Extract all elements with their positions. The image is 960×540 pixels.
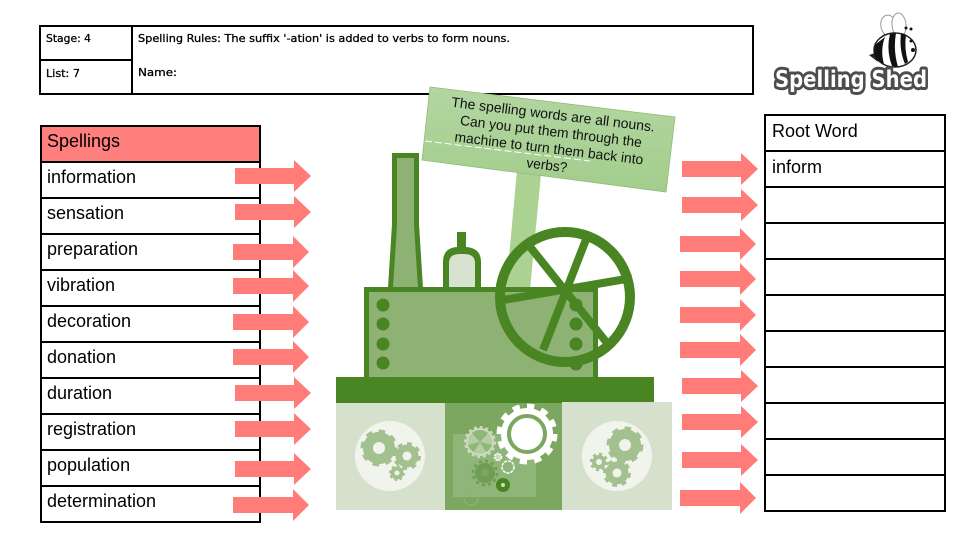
- centre inner panel: [453, 434, 536, 497]
- base platform: [336, 377, 654, 403]
- root word table: inform: [772, 157, 822, 177]
- sign board: verbs?: [526, 154, 568, 175]
- spellings table: Spellings: [47, 131, 120, 151]
- sign board: machine to turn them back into: [454, 128, 644, 167]
- boiler box: [366, 290, 596, 380]
- spellings table: sensation: [47, 203, 124, 223]
- right gear circle: [582, 421, 652, 491]
- arrows: machine to root words: [680, 153, 758, 514]
- bottle: [443, 232, 481, 288]
- flywheel: [500, 232, 632, 362]
- logo: Spelling Shed bee: [775, 12, 927, 93]
- large white gear: [499, 406, 555, 462]
- right panel: [562, 402, 672, 510]
- centre small gears: [464, 427, 514, 505]
- spellings table: vibration: [47, 275, 115, 295]
- spellings table: donation: [47, 347, 116, 367]
- chimney: [388, 153, 423, 288]
- spellings table: decoration: [47, 311, 131, 331]
- spellings table: registration: [47, 419, 136, 439]
- spellings table: population: [47, 455, 130, 475]
- spellings table: duration: [47, 383, 112, 403]
- machine illustration: [336, 153, 672, 510]
- centre panel: [445, 403, 562, 510]
- arrows: spellings to machine: [233, 160, 311, 521]
- header table: Spelling Rules: The suffix '-ation' is added to verbs to form nouns.: [138, 32, 510, 45]
- sign board: Can you put them through the: [459, 112, 643, 150]
- left panel: [336, 403, 445, 510]
- spellings table: information: [47, 167, 136, 187]
- left gear circle: [355, 421, 425, 491]
- spellings table: preparation: [47, 239, 138, 259]
- root word table: [765, 115, 945, 511]
- spellings table: determination: [47, 491, 156, 511]
- sign board: [422, 87, 675, 192]
- rivets: [376, 298, 582, 370]
- header table: Stage: 4: [46, 32, 91, 45]
- header table: [40, 26, 753, 94]
- sign post: [506, 170, 541, 290]
- header table: Name:: [138, 66, 177, 79]
- header table: List: 7: [46, 67, 80, 80]
- spellings table: [40, 126, 260, 522]
- root word table: Root Word: [772, 121, 858, 141]
- sign board: The spelling words are all nouns.: [450, 94, 656, 135]
- logo: Spelling Shed bee: Spelling Shed: [775, 67, 927, 93]
